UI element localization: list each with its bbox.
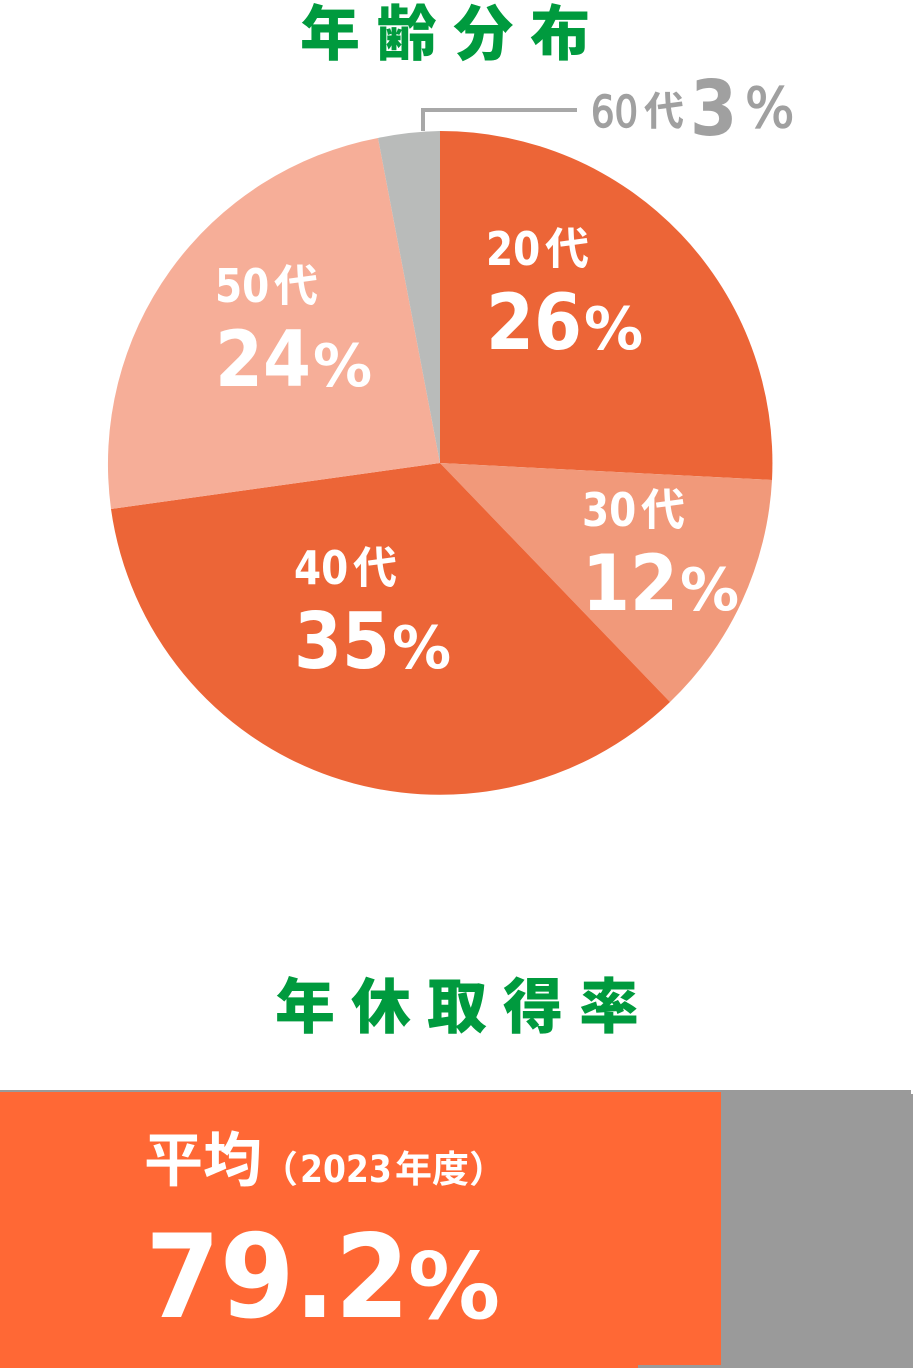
label: 40s 35%: 35 xyxy=(294,597,390,687)
label: 40s 35%: % xyxy=(392,613,451,682)
bar: remainder xyxy=(0,1090,913,1368)
label: 20s 26%: % xyxy=(584,294,643,363)
label: average (FY2023): 平均 xyxy=(144,1113,262,1198)
label: 20s 26% xyxy=(486,213,643,368)
leader line: 60s xyxy=(423,110,577,131)
label: 40s 35% xyxy=(294,532,451,687)
label: 60s 3%: 3 xyxy=(690,65,737,154)
value: 79.2%: 79.2 xyxy=(146,1211,410,1345)
label: 30s 12%: 代 xyxy=(641,474,685,538)
label: 20s 26%: 26 xyxy=(486,278,582,368)
label: 30s 12% xyxy=(582,474,739,629)
label: 20s 26%: 20 xyxy=(486,223,540,277)
label: 50s 24%: % xyxy=(313,331,372,400)
label: 60s 3%: % xyxy=(745,76,794,140)
label: 50s 24%: 50 xyxy=(215,260,269,314)
label: 60s 3%: 60 xyxy=(591,86,638,138)
label: 50s 24% xyxy=(215,250,372,405)
label: 40s 35%: 40 xyxy=(294,542,348,596)
pie chart: age distribution xyxy=(108,131,772,795)
label: 50s 24%: 24 xyxy=(215,315,311,405)
title: paid leave rate: 年休取得率 xyxy=(275,959,655,1046)
label: average (FY2023): 年度） xyxy=(395,1139,506,1193)
value: 79.2%: % xyxy=(408,1233,500,1340)
slice: 60s xyxy=(378,131,440,463)
slice: 50s xyxy=(108,138,440,509)
label: 30s 12%: % xyxy=(680,555,739,624)
slice: 30s xyxy=(440,463,772,702)
label: 30s 12%: 12 xyxy=(582,539,678,629)
label: 40s 35%: 代 xyxy=(353,532,397,596)
slice: 40s xyxy=(111,463,670,795)
label: 50s 24%: 代 xyxy=(274,250,318,314)
bar: average 79.2% xyxy=(0,1092,721,1368)
label: 60s 3% xyxy=(591,65,794,154)
label: average (FY2023): （ xyxy=(261,1139,298,1193)
label: average (FY2023) xyxy=(144,1113,506,1198)
label: 60s 3%: 代 xyxy=(644,79,684,137)
slice: 20s xyxy=(440,131,772,480)
label: 20s 26%: 代 xyxy=(545,213,589,277)
label: 30s 12%: 30 xyxy=(582,484,636,538)
label: average (FY2023): 2023 xyxy=(300,1148,392,1191)
